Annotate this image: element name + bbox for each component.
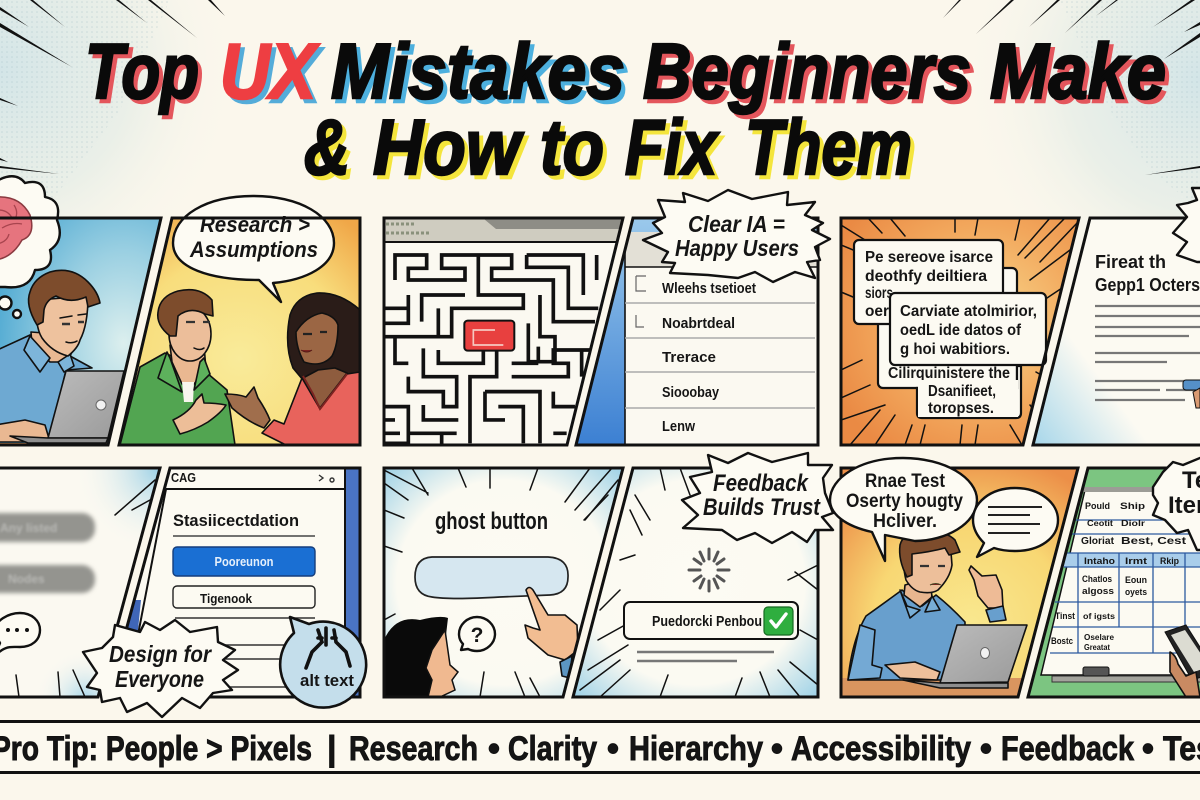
title line 2: to xyxy=(544,107,608,195)
starburst: Design for Everyone: Design for xyxy=(109,641,212,667)
icon: loading spinner xyxy=(689,549,729,591)
badge: alt text: alt text xyxy=(300,671,354,690)
schedule table: Bostc xyxy=(1051,636,1073,647)
starburst: Clear IA = Happy Users: Happy Users xyxy=(675,235,799,261)
panel outline xyxy=(0,218,161,445)
title line 1: Make xyxy=(990,27,1166,115)
panel outline xyxy=(576,218,818,445)
card: bottom: toropses. xyxy=(928,400,994,417)
schedule table: Chatlos xyxy=(1082,574,1112,584)
browser top bar xyxy=(380,218,630,242)
card: front: Carviate atolmirior, xyxy=(900,303,1037,320)
banner text: • xyxy=(607,730,619,768)
menu items: Trerace xyxy=(662,350,716,366)
action rays xyxy=(384,468,618,697)
menu items: Lenw xyxy=(662,419,696,435)
starburst: Clear IA = Happy Users: Clear IA = xyxy=(688,211,785,237)
whiteboard xyxy=(1041,487,1200,682)
schedule table: Eoun xyxy=(1125,575,1147,585)
body lines xyxy=(1095,306,1200,400)
blurred button labels xyxy=(0,521,57,586)
panel: blurry low contrast UI xyxy=(0,468,165,700)
schedule table: Oselare xyxy=(1084,633,1115,642)
panel: user testing with laptop xyxy=(830,458,1078,698)
title line 2: How xyxy=(373,103,524,191)
starburst: Feedback Builds Trust: Feedback xyxy=(713,470,809,497)
panel outline xyxy=(384,468,623,697)
schedule table: Rkip xyxy=(1160,556,1179,567)
schedule table: Ceotit xyxy=(1087,518,1113,528)
panel: overlapping dense text cards xyxy=(841,218,1079,445)
title line 2: Them xyxy=(745,103,912,191)
schedule table: Tinst xyxy=(1055,611,1076,622)
question bubble: ? xyxy=(471,624,483,647)
banner text: • xyxy=(980,730,992,768)
primary blue button xyxy=(173,547,315,576)
panel: clear navigation list xyxy=(570,190,830,447)
panel: accessible form UI xyxy=(83,468,366,717)
banner text: Pro Tip: People > Pixels xyxy=(0,730,312,768)
panel outline xyxy=(108,468,360,697)
banner text: Accessibility xyxy=(791,730,971,768)
action rays xyxy=(841,218,1078,445)
panel outline xyxy=(841,218,1079,445)
starburst: Feedback Builds Trust: Builds Trust xyxy=(703,494,821,521)
schedule table: Ship xyxy=(1120,501,1145,512)
card: front: g hoi wabitiors. xyxy=(900,341,1010,358)
starburst: Clear IA = Happy Users xyxy=(643,190,830,282)
title line 1: Beginners xyxy=(647,31,975,119)
card: front xyxy=(890,293,1046,365)
schedule table: Pould xyxy=(1085,501,1110,512)
title line 2: Them xyxy=(749,107,916,195)
menu dividers xyxy=(625,303,815,408)
user head silhouette xyxy=(384,617,458,697)
card: top left: oer xyxy=(865,303,889,320)
blurred button labels: Any listed xyxy=(0,521,57,535)
card: top left: Pe sereove isarce xyxy=(865,249,993,266)
schedule table: Intaho xyxy=(1084,556,1115,567)
schedule table: Best, Cest xyxy=(1121,536,1187,547)
figure: man at laptop xyxy=(0,270,124,450)
schedule table: of igsts xyxy=(1083,611,1115,621)
blurred button labels: Nodes xyxy=(8,572,45,586)
hand holding phone xyxy=(1165,625,1200,697)
title line 1 xyxy=(85,27,1170,119)
heading xyxy=(1095,252,1200,295)
schedule table: Gloriat xyxy=(1081,536,1115,547)
figure: man talking at laptop xyxy=(848,532,1006,680)
card: top left: deothfy deiltiera xyxy=(865,268,987,285)
title line 1: UX xyxy=(220,27,320,115)
starburst: Test Iterate cropped xyxy=(1153,458,1200,550)
title xyxy=(85,27,1170,195)
title line 1: Beginners xyxy=(643,27,971,115)
schedule table: oyets xyxy=(1125,587,1147,597)
panel outline xyxy=(119,218,360,445)
pointing hand xyxy=(525,588,578,678)
woman's hand xyxy=(225,387,270,428)
panel: confusing maze website xyxy=(380,215,630,450)
panel: whiteboard testing schedule xyxy=(1028,458,1200,697)
form lines xyxy=(175,618,315,687)
man's hand xyxy=(173,394,226,434)
banner text: • xyxy=(1142,730,1154,768)
banner text xyxy=(0,730,1200,768)
secondary outline button xyxy=(173,586,315,608)
title line 2: & xyxy=(304,103,350,191)
primary blue button: Pooreunon xyxy=(214,555,274,569)
question bubble xyxy=(459,617,495,651)
thought bubble with brain xyxy=(0,176,60,318)
icon: chat bubble with dots xyxy=(0,613,40,655)
label: ghost button: ghost button xyxy=(435,508,548,535)
action rays xyxy=(580,468,818,697)
desk xyxy=(841,678,1031,698)
card: bottom: Dsanifieet, xyxy=(928,383,996,400)
starburst: Design for Everyone: Everyone xyxy=(115,666,204,692)
banner text: • xyxy=(771,730,783,768)
card: back card xyxy=(878,268,1017,388)
starburst: Design for Everyone xyxy=(83,620,238,717)
speech bubble: quote xyxy=(830,458,977,561)
banner text: Feedback xyxy=(1001,730,1134,768)
hand with pen xyxy=(1183,380,1200,408)
title line 1: UX xyxy=(224,31,324,119)
blurred buttons xyxy=(0,513,95,593)
starburst: cropped at edge xyxy=(1173,188,1200,262)
figure: woman in red top xyxy=(225,293,360,447)
title line 2: How xyxy=(377,107,528,195)
title line 2: to xyxy=(540,103,604,191)
banner text: • xyxy=(488,730,500,768)
banner text: Hierarchy xyxy=(629,730,763,768)
feedback message box: Puedorcki Penbou xyxy=(652,614,762,630)
panel outline xyxy=(1033,218,1200,445)
schedule table xyxy=(1050,501,1200,653)
title line 1: Mistakes xyxy=(331,27,625,115)
panel: readable headline and text xyxy=(1033,188,1200,445)
title line 2: Fix xyxy=(629,107,724,195)
card: top left: siors xyxy=(865,285,893,302)
menu items xyxy=(636,276,756,435)
feedback message box xyxy=(624,602,798,639)
panel outline xyxy=(841,468,1078,697)
menu items: Noabrtdeal xyxy=(662,316,735,332)
figure: man in green shirt xyxy=(120,290,235,445)
form heading: Stasiicectdation xyxy=(173,511,299,530)
title line 2 xyxy=(304,103,916,195)
comic burst rays: upper left xyxy=(0,0,225,174)
window header xyxy=(172,473,335,483)
schedule table: Diolr xyxy=(1121,518,1146,528)
badge: alt text xyxy=(280,617,366,708)
speech bubble: quote: Rnae Test xyxy=(865,471,946,492)
card: back card: Cilirquinistere the xyxy=(888,365,1010,382)
starburst: Feedback Builds Trust xyxy=(682,453,833,543)
card: bottom xyxy=(917,366,1021,418)
icon: green check xyxy=(764,607,793,635)
heading: Fireat th xyxy=(1095,252,1166,272)
title line 1: Make xyxy=(994,31,1170,119)
speech bubble: Research > Assumptions: Assumptions xyxy=(189,237,318,262)
secondary outline button: Tigenook xyxy=(200,592,252,606)
icon: accessibility glyph xyxy=(306,628,350,668)
window header: CAG xyxy=(171,470,196,485)
schedule table: Greatat xyxy=(1084,643,1110,652)
speech bubble: lines only xyxy=(973,488,1058,557)
title line 1: Mistakes xyxy=(335,31,629,119)
menu items: Siooobay xyxy=(662,385,719,401)
ghost button shape xyxy=(415,557,568,598)
panel: ghost button confusion xyxy=(384,468,623,697)
banner text: | xyxy=(327,730,337,768)
hand on keyboard xyxy=(885,662,940,680)
title line 2: & xyxy=(308,107,354,195)
panel: research over assumptions conversation xyxy=(119,196,360,447)
title line 1: Top xyxy=(89,31,203,119)
menu items: Wleehs tsetioet xyxy=(662,281,756,297)
goal: red box xyxy=(464,321,514,351)
panel outline xyxy=(573,468,818,697)
title line 1: Top xyxy=(85,27,199,115)
comic burst rays: upper right xyxy=(943,0,1200,175)
panel: developer alone with laptop xyxy=(0,176,165,450)
panel outline xyxy=(384,218,623,445)
speech bubble: Research > Assumptions: Research > xyxy=(200,212,310,237)
banner text: Research xyxy=(349,730,478,768)
banner text: Clarity xyxy=(508,730,597,768)
card: top left xyxy=(854,240,1003,324)
speech bubble: quote: Oserty hougty xyxy=(846,491,963,512)
panel outline xyxy=(0,468,160,697)
panel: feedback confirmation xyxy=(573,453,833,697)
icon: brain xyxy=(0,197,32,260)
maze walls xyxy=(385,255,598,445)
schedule table: Irmt xyxy=(1125,556,1148,567)
card: front: oedL ide datos of xyxy=(900,322,1022,339)
speech bubble: quote: Hcliver. xyxy=(873,511,937,532)
bottom pro tip banner xyxy=(0,721,1200,773)
panel outline xyxy=(1028,468,1200,697)
title line 2: Fix xyxy=(625,103,720,191)
schedule table: algoss xyxy=(1082,586,1114,596)
pointing hand xyxy=(969,566,1003,608)
speech bubble: Research > Assumptions xyxy=(173,196,334,302)
laptop xyxy=(903,625,1027,688)
